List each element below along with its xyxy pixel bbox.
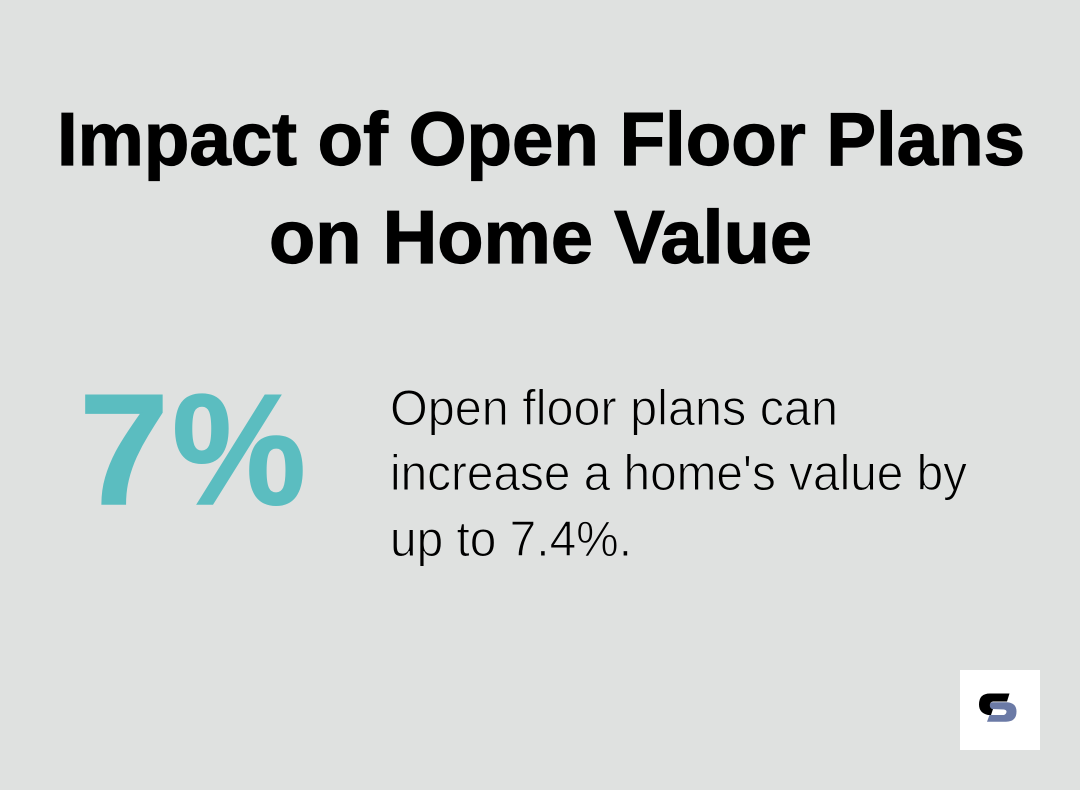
big statistic: 7%: 7 (79, 362, 169, 538)
description text: increase a home's value by (390, 445, 967, 501)
description text: up to 7.4%. (390, 511, 632, 567)
logo mark: blue part (987, 702, 1016, 722)
logo badge (960, 670, 1040, 750)
description text (390, 380, 967, 567)
title: Impact of Open Floor Plans (57, 97, 1025, 181)
big statistic: 7%: % (172, 362, 306, 538)
description text: Open floor plans can (390, 380, 838, 436)
logo mark: black part (979, 694, 1010, 715)
big statistic: 7% (79, 362, 306, 538)
title: on Home Value (269, 195, 812, 279)
title (57, 97, 1025, 279)
